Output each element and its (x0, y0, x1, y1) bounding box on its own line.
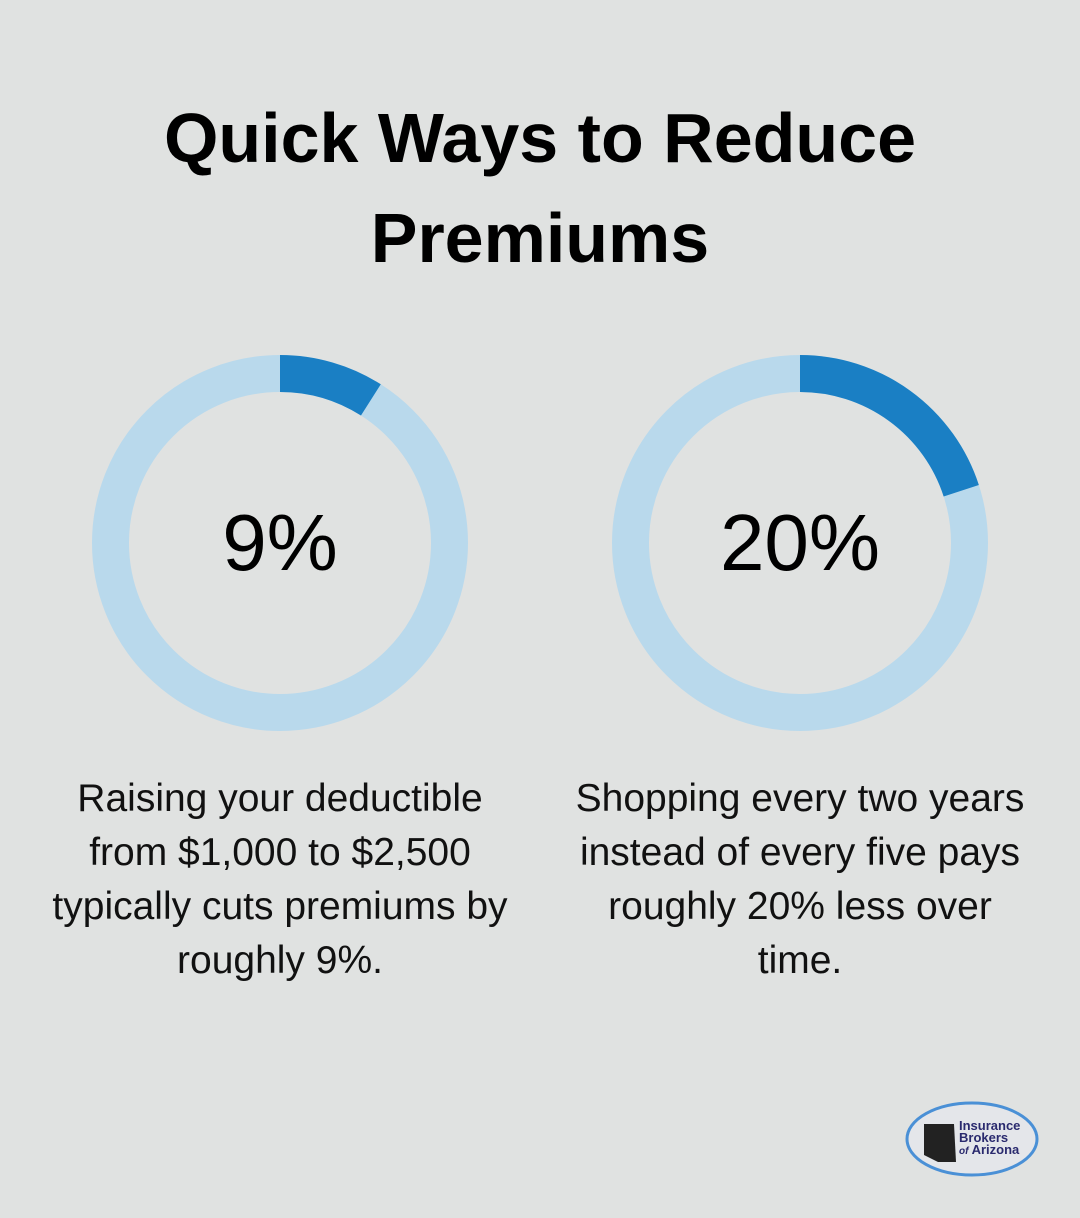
title: Quick Ways to Reduce (164, 99, 916, 177)
title: Premiums (371, 199, 709, 277)
donut: 20%: 20% (720, 498, 880, 587)
title (164, 99, 916, 277)
text: shopping: Shopping every two years instead of every five pays roughly 20% less over time. (576, 777, 1024, 982)
donut: 9%: 9% (222, 498, 338, 587)
donut: 20% (612, 355, 988, 731)
logo: of Arizona (959, 1142, 1020, 1157)
logo: Insurance (959, 1118, 1020, 1133)
logo (906, 1102, 1038, 1176)
text: deductible: Raising your deductible from $1,000 to $2,500 typically cuts premiums by roughly 9%. (52, 777, 508, 982)
logo: Brokers (959, 1130, 1008, 1145)
donut: 9% (92, 355, 468, 731)
